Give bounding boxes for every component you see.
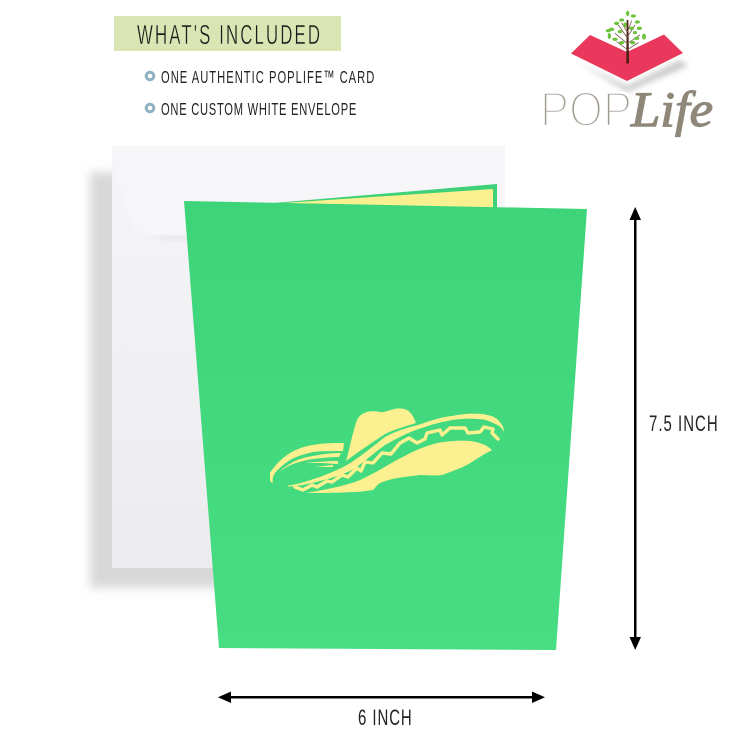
item: white envelope: ONE CUSTOM WHITE ENVELOPE xyxy=(161,99,356,120)
logo shadow xyxy=(578,60,688,92)
arrow: width dimension xyxy=(218,692,545,703)
icon: red open book xyxy=(571,34,683,81)
envelope xyxy=(90,146,505,588)
label: 6 inch: 6 INCH xyxy=(358,705,412,730)
envelope shadow xyxy=(90,172,390,588)
arrow: height dimension xyxy=(630,207,641,650)
envelope body xyxy=(112,146,505,568)
front panel of card xyxy=(184,201,587,650)
back panel of card xyxy=(250,184,497,212)
card xyxy=(184,184,587,650)
flap shadow xyxy=(150,236,300,241)
item: poplife card: ONE AUTHENTIC POPLIFE™ CARD xyxy=(161,67,374,88)
heading: what's included: WHAT'S INCLUDED xyxy=(137,19,320,50)
envelope flap xyxy=(112,146,505,236)
icon: bullet one xyxy=(146,72,154,80)
hat zigzag trim xyxy=(295,427,498,490)
hat crown xyxy=(346,408,416,461)
logo word: life: Life xyxy=(630,81,713,137)
hat left swoosh xyxy=(270,443,344,483)
label: 7.5 inch: 7.5 INCH xyxy=(649,411,718,436)
icon: sombrero cut-out xyxy=(270,408,504,493)
icon: tree xyxy=(606,11,646,63)
logo word: pop: POP xyxy=(540,83,632,137)
included list xyxy=(146,67,374,120)
hat lower brim xyxy=(306,441,492,493)
icon: bullet two xyxy=(146,104,154,112)
yellow inside of card xyxy=(283,189,493,212)
logo: poplife xyxy=(540,11,713,137)
hat left streaks xyxy=(279,453,341,472)
hat brim band xyxy=(288,414,504,486)
